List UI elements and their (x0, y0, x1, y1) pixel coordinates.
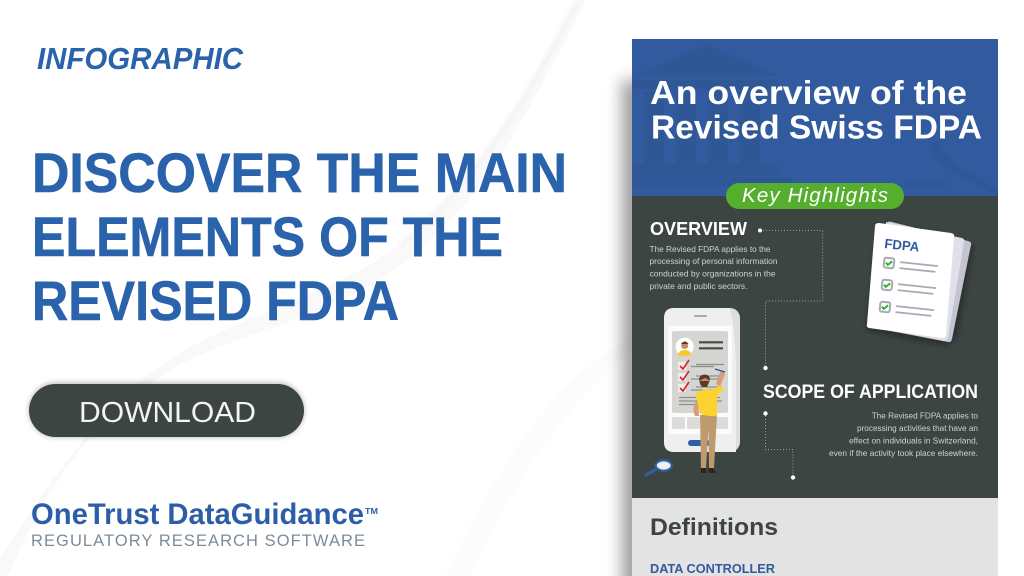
OneTrust DataGuidance logo: TM (365, 506, 378, 516)
definitions heading: Definitions (650, 514, 778, 541)
data controller label: DATA CONTROLLER (650, 561, 776, 576)
checklist row 2 (882, 280, 936, 295)
overview text (650, 244, 778, 291)
download button: DOWNLOAD (79, 397, 256, 429)
label: INFOGRAPHIC: INFOGRAPHIC (37, 41, 244, 76)
scope of application text: The Revised FDPA applies to (872, 411, 978, 421)
definitions section (632, 498, 998, 576)
checklist row 1 (884, 258, 938, 273)
scope of application text: processing activities that have an (857, 423, 978, 433)
dark section (632, 196, 998, 499)
poster shadow (622, 80, 646, 576)
icon: person writing (694, 369, 725, 473)
icon: smartphone with form (664, 308, 740, 452)
overview text: private and public sectors. (650, 281, 748, 291)
OneTrust DataGuidance logo (31, 498, 378, 550)
scope of application text: effect on individuals in Switzerland, (849, 436, 978, 446)
poster panel (632, 39, 998, 576)
main heading (32, 141, 567, 332)
key highlights pill: Key Highlights (742, 184, 888, 207)
OneTrust DataGuidance logo: OneTrust DataGuidance (31, 498, 364, 531)
scope of application text: even if the activity took place elsewhere. (829, 448, 978, 458)
title: Revised Swiss FDPA (651, 110, 982, 146)
scope of application heading: SCOPE OF APPLICATION (763, 382, 978, 403)
icon: magnifying glass (646, 460, 672, 475)
background swooshes (0, 0, 632, 576)
overview text: The Revised FDPA applies to the (650, 244, 771, 254)
dotted connector: scope downward (763, 411, 795, 480)
dotted connector: overview to scope (758, 228, 823, 370)
title: An overview of the (650, 75, 967, 112)
main heading: ELEMENTS OF THE (32, 205, 503, 268)
overview heading: OVERVIEW (650, 219, 747, 239)
scope of application text (829, 411, 978, 458)
main heading: REVISED FDPA (32, 269, 399, 332)
icon: FDPA checklist document: FDPA (884, 236, 920, 255)
icon: FDPA checklist document (866, 222, 974, 346)
OneTrust DataGuidance logo: REGULATORY RESEARCH SOFTWARE (31, 532, 365, 550)
header band (632, 39, 998, 197)
download button (29, 383, 304, 437)
checklist row 3 (880, 302, 934, 317)
overview text: conducted by organizations in the (650, 268, 776, 278)
overview text: processing of personal information (650, 256, 778, 266)
main heading: DISCOVER THE MAIN (32, 141, 567, 204)
title (650, 75, 982, 146)
